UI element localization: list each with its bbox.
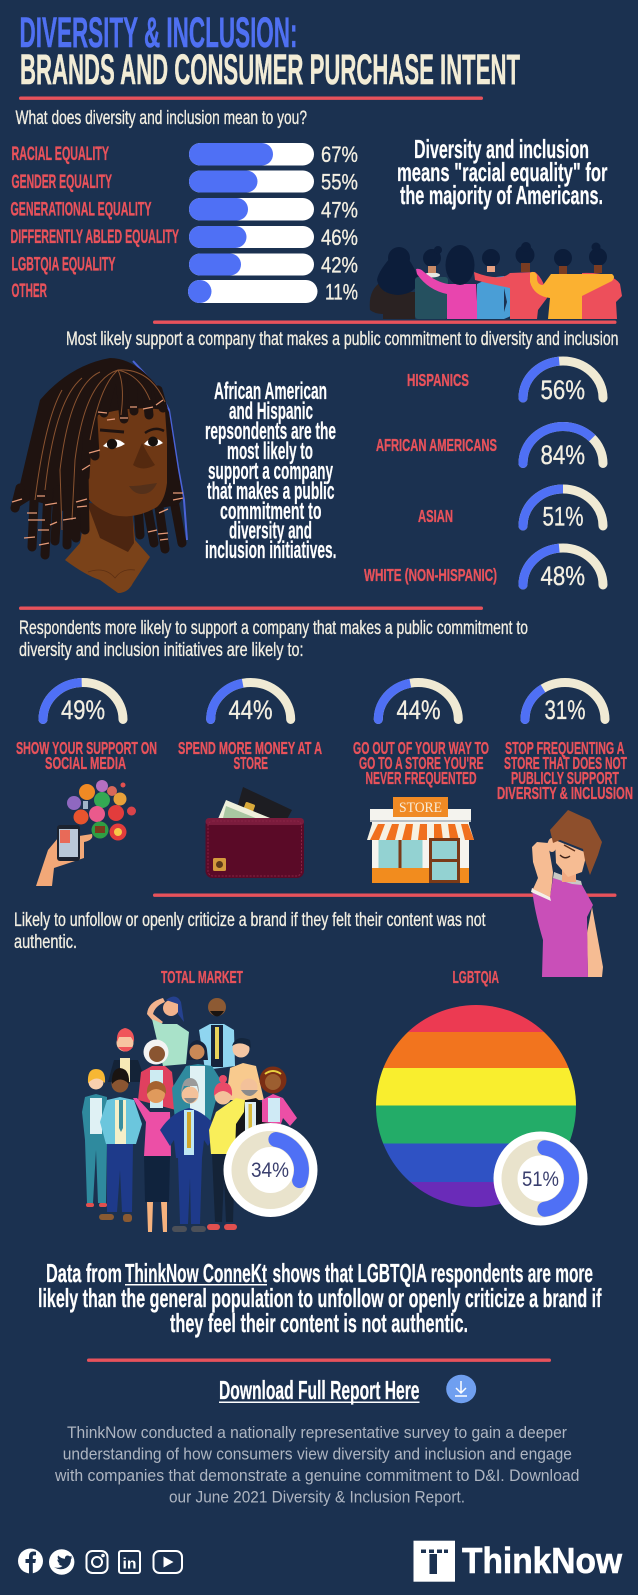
text block: survey description: our June 2021 Diversity & Inclusion Report. [169,1489,465,1507]
illustration: woman with dreadlocks [12,358,187,593]
title [20,9,520,94]
icon: hand holding phone with app bubbles [36,780,136,886]
icon: linkedin [119,1551,140,1573]
title: DIVERSITY & INCLUSION: [20,9,298,57]
gauge: go out of your way 44%: 44% [396,695,440,725]
icon: download arrow [446,1375,476,1403]
gauge: stop frequenting 31%: 31% [544,695,586,725]
text block: survey description: with companies that demonstrate a genuine commitment to D&I. Download [54,1467,580,1485]
text block: african american and hispanic: support a company [208,458,333,485]
text block: african american and hispanic: and Hispanic [229,398,313,425]
text block: african american and hispanic: most likely to [227,438,313,465]
text block: likely to unfollow: Likely to unfollow or openly criticize a brand if they felt their content was not [14,910,486,931]
bar row: other: 11% [325,280,358,304]
gauge: african americans 84%: 84% [540,440,585,470]
label: stop frequenting [497,738,633,803]
text block: african american and hispanic: that makes a public [207,478,334,505]
label: show your support [16,738,157,773]
text block: thinknow connekt data: ThinkNow ConneKt [125,1258,267,1288]
panel: likely actions [16,682,633,886]
text block: thinknow connekt data: they feel their content is not authentic. [170,1308,468,1338]
text block: african american and hispanic: inclusion initiatives. [205,537,336,564]
gauge: hispanics 56%: HISPANICS [407,370,469,390]
bar row: racial equality: RACIAL EQUALITY [12,144,109,165]
text block: survey description: understanding of how consumers view diversity and inclusion and engage [63,1446,572,1464]
bar row: other: OTHER [12,281,47,302]
text block: african american and hispanic: repsondents are the [205,418,336,445]
panel: total market [82,967,318,1232]
logo: thinknow: ThinkNow [462,1540,623,1581]
text block: thinknow connekt data: Data from [46,1258,122,1288]
donut chart: lgbtqia 51%: 51% [522,1168,559,1191]
bar row: gender equality: 55% [321,170,358,194]
icon: linkedin: in [122,1556,136,1572]
gauge: go out of your way 44% [374,682,458,725]
social icons [18,1548,182,1575]
text block: survey description [54,1424,580,1507]
bar row: generational equality: GENERATIONAL EQUALITY [10,200,152,220]
bar row: lgbtqia equality: 42% [321,252,358,278]
icon: youtube [154,1551,182,1573]
icon: instagram [86,1551,108,1573]
label: total market: TOTAL MARKET [161,967,243,987]
bar row: racial equality: 67% [321,142,358,167]
gauge: spend more 44%: 44% [228,695,272,725]
text block: african american and hispanic: commitment to [220,498,322,525]
callout: racial equality [397,134,608,210]
bar row: differently abled equality: DIFFERENTLY ABLED EQUALITY [10,227,179,248]
panel: what does diversity mean [10,108,622,319]
link: download full report: Download Full Report Here [219,1375,420,1405]
illustration: woman with raised hand [531,810,603,977]
gauge: spend more 44% [206,682,291,725]
bar row: racial equality [12,142,358,167]
text block: african american and hispanic [205,378,336,564]
gauge: show support 49% [38,682,123,725]
gauge: african americans 84%: AFRICAN AMERICANS [376,435,497,455]
gauge: asian 51% [418,489,603,532]
bar row: lgbtqia equality [12,252,358,278]
donut chart: total market 34%: 34% [251,1159,289,1182]
panel: lgbtqia [370,967,588,1226]
label: spend more money: STORE [234,753,268,773]
label: show your support: SOCIAL MEDIA [45,753,126,773]
gauge: show support 49%: 49% [61,695,105,725]
label: lgbtqia: LGBTQIA [452,967,499,987]
text block: likely to unfollow [14,910,486,953]
bar row: gender equality [12,170,358,194]
icon: facebook [18,1548,43,1574]
text block: african american and hispanic: African American [214,378,327,405]
heading: respondents more likely: diversity and inclusion initiatives are likely to: [19,640,304,661]
label: go out of your way: GO OUT OF YOUR WAY TO [353,738,489,758]
label: go out of your way: NEVER FREQUENTED [366,768,476,788]
panel: support by ethnicity gauges [364,361,603,591]
gauge: asian 51%: ASIAN [418,506,453,526]
bar row: other [12,280,358,304]
gauge: african americans 84% [376,426,603,470]
gauge: hispanics 56%: 56% [540,375,585,405]
gauge: white non-hispanic 48%: WHITE (NON-HISPANIC) [364,565,497,585]
gauge: hispanics 56% [407,361,603,405]
text block: likely to unfollow: authentic. [14,932,77,953]
bar row: gender equality: GENDER EQUALITY [12,172,112,193]
gauge: white non-hispanic 48%: 48% [540,561,585,591]
illustration: crowd of diverse people [82,996,297,1232]
donut chart: lgbtqia 51% [494,1132,588,1226]
rainbow flag circle [376,1005,576,1207]
label: go out of your way [353,738,489,788]
heading: question: What does diversity and inclusion mean to you? [16,108,307,129]
text block: thinknow connekt data [38,1258,602,1338]
label: go out of your way: GO TO A STORE YOU'RE [359,753,484,773]
icon: storefront: STORE [399,800,442,816]
label: spend more money [178,738,322,773]
illustration: group of people from behind [370,242,622,319]
label: spend more money: SPEND MORE MONEY AT A [178,738,322,758]
label: show your support: SHOW YOUR SUPPORT ON [16,738,157,758]
text block: african american and hispanic: diversity and [229,518,312,544]
text block: survey description: ThinkNow conducted a nationally representative survey to gain a deeper [67,1424,567,1442]
bar row: generational equality [10,198,358,222]
heading: respondents more likely [19,618,528,661]
bar chart: meaning of diversity [10,142,358,304]
bar row: lgbtqia equality: LGBTQIA EQUALITY [12,254,116,276]
icon: storefront [367,797,474,883]
gauge: stop frequenting 31% [520,682,605,725]
gauge: white non-hispanic 48% [364,548,603,591]
bar row: generational equality: 47% [321,198,358,222]
icon: twitter [49,1549,74,1575]
donut chart: total market 34% [224,1123,318,1217]
bar row: differently abled equality: 46% [321,225,358,250]
icon: wallet with card and cash [206,787,304,878]
gauge: asian 51%: 51% [542,502,584,532]
